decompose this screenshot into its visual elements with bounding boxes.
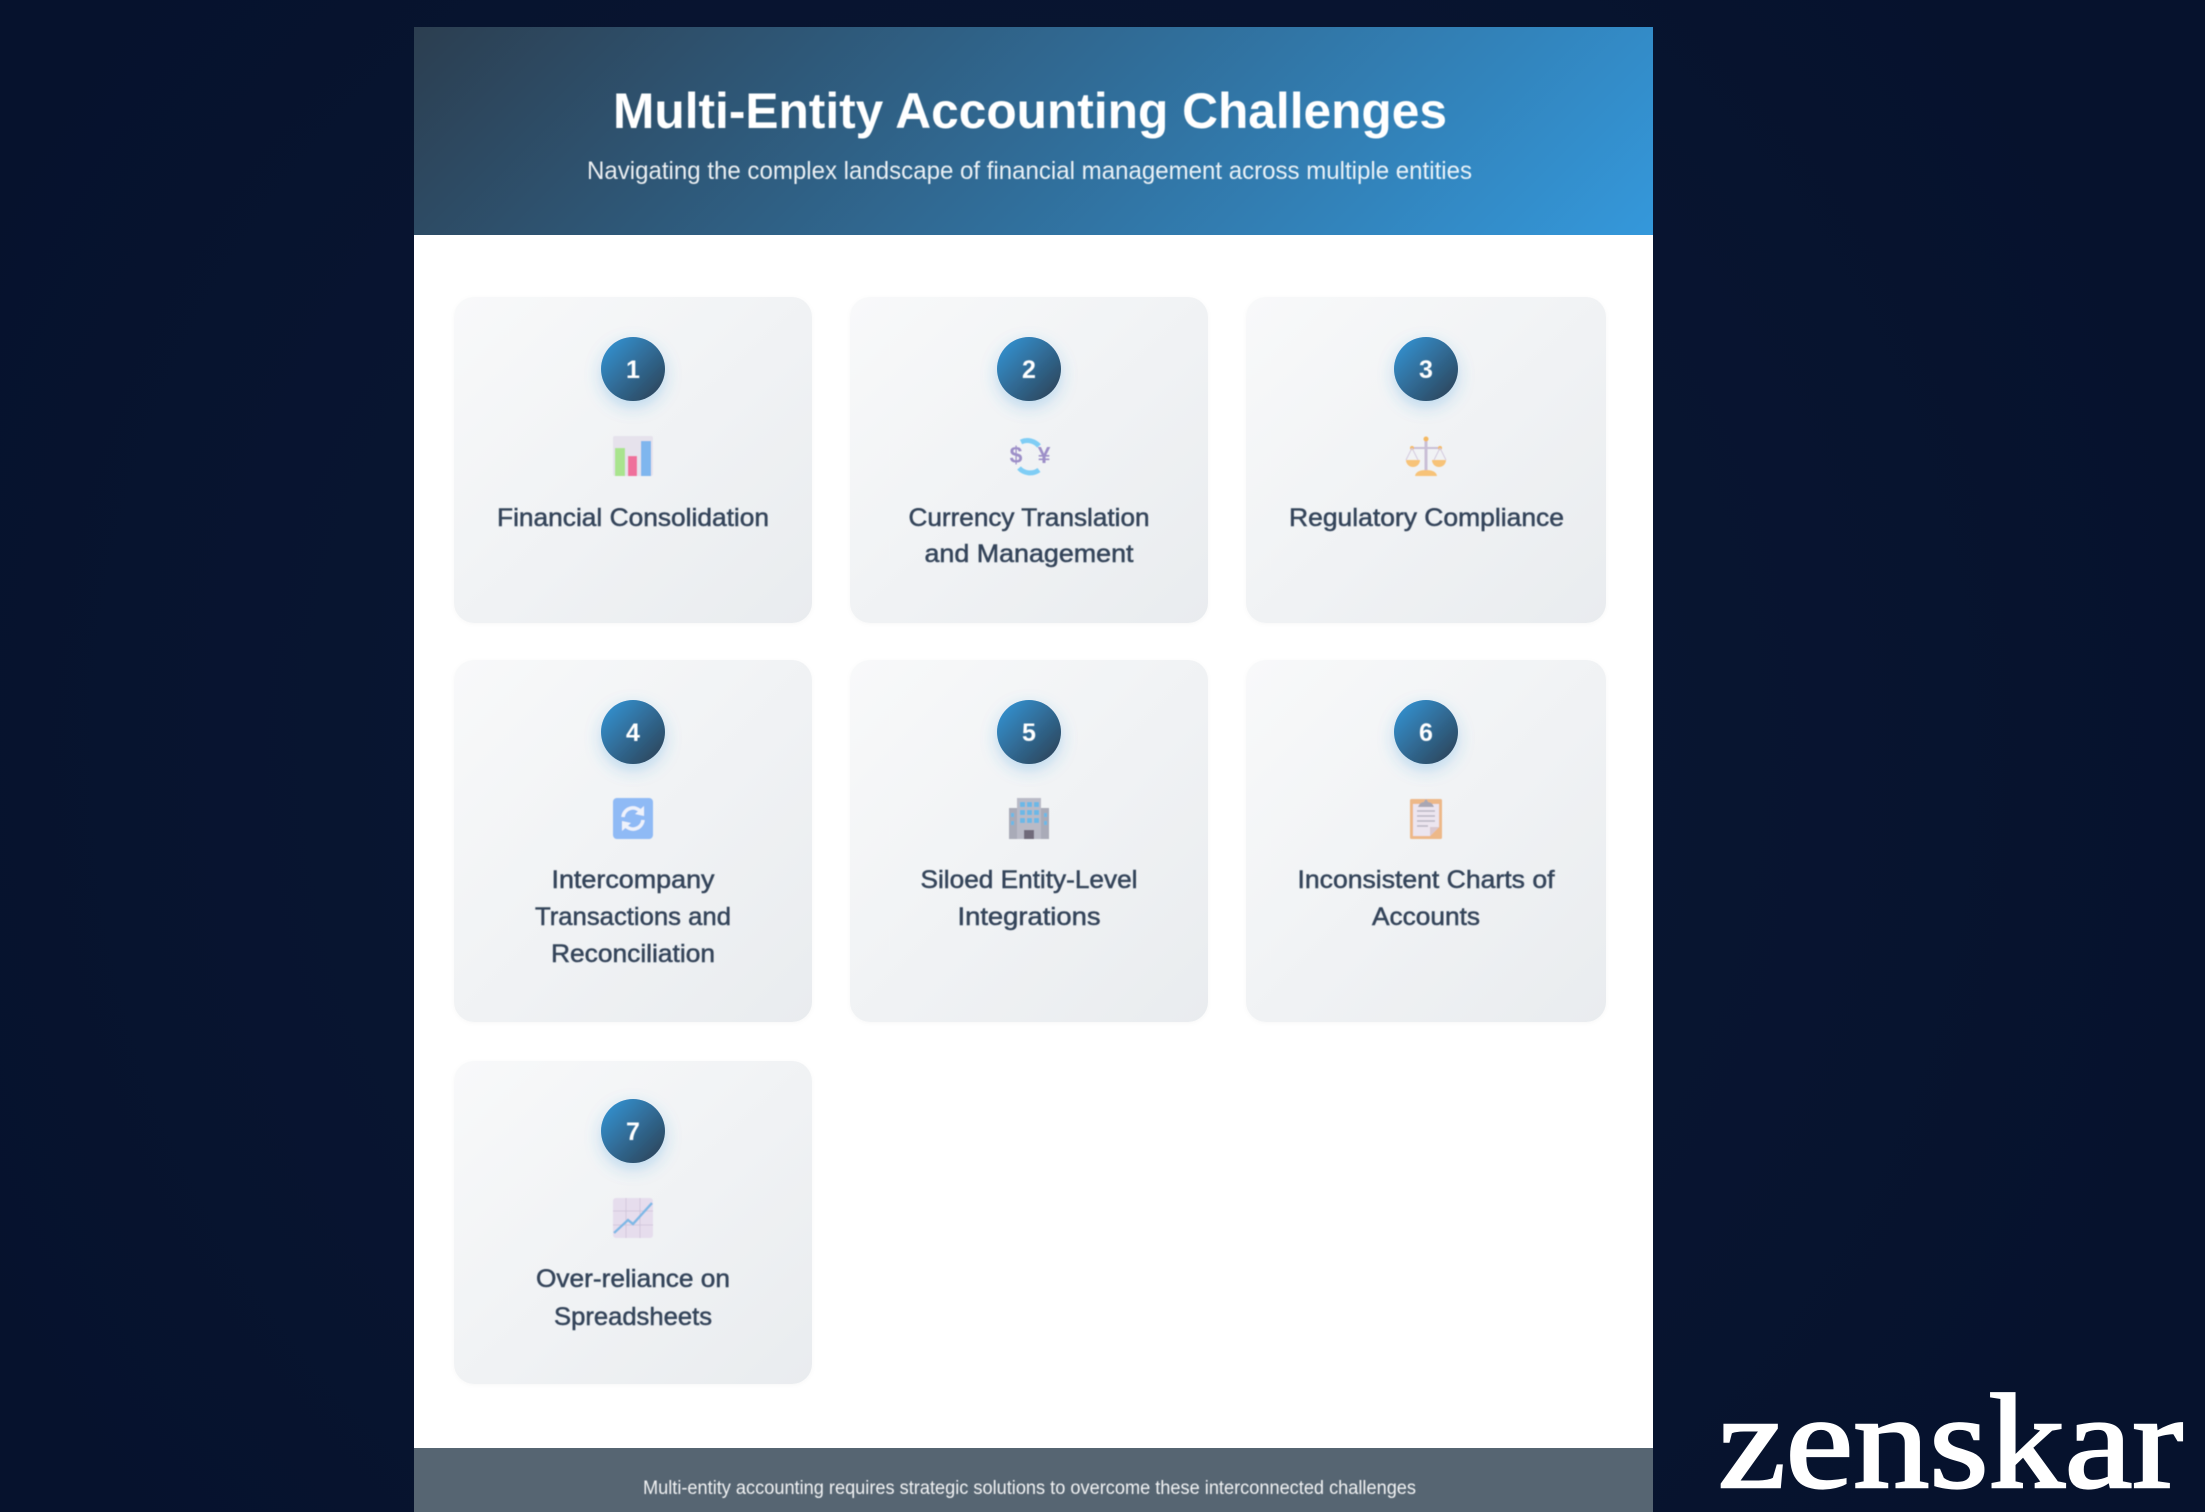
label [920, 866, 1138, 931]
number badge 1 [601, 337, 665, 401]
icon: refresh arrows [613, 798, 653, 839]
icon: balance scales [1406, 436, 1446, 476]
label [1298, 866, 1555, 931]
label: Currency Translation [908, 504, 1150, 532]
card 4: Intercompany Transactions and Reconciliation [454, 660, 812, 1022]
icon: office building [1009, 798, 1049, 839]
number badge 4 [601, 700, 665, 764]
label: and Management [924, 540, 1134, 568]
label: Inconsistent Charts of [1298, 866, 1555, 894]
label [908, 504, 1150, 568]
label: Over-reliance on [536, 1265, 730, 1293]
icon: bar chart [613, 436, 653, 476]
number badge 2 [997, 337, 1061, 401]
icon: currency exchange: $ [1010, 442, 1023, 468]
label: Reconciliation [551, 940, 715, 968]
label: Financial Consolidation [497, 504, 769, 532]
icon: currency exchange: ¥ [1038, 442, 1051, 468]
card 1: Financial Consolidation [454, 297, 812, 623]
footer text: Multi-entity accounting requires strategic solutions to overcome these interconnected challenges [643, 1478, 1416, 1499]
icon: currency exchange [1010, 441, 1051, 473]
number badge 1: 1 [626, 356, 640, 384]
card 6: Inconsistent Charts of Accounts [1246, 660, 1606, 1022]
card 5: Siloed Entity-Level Integrations [850, 660, 1208, 1022]
number badge 6: 6 [1419, 719, 1433, 747]
title: Multi-Entity Accounting Challenges [613, 83, 1447, 139]
label: Accounts [1372, 903, 1480, 931]
card 7: Over-reliance on Spreadsheets [454, 1061, 812, 1384]
label: Transactions and [535, 903, 731, 931]
label: Siloed Entity-Level [920, 866, 1138, 894]
number badge 7 [601, 1099, 665, 1163]
footer band [414, 1448, 1653, 1512]
number badge 6 [1394, 700, 1458, 764]
number badge 4: 4 [626, 719, 640, 747]
icon: line chart [613, 1198, 653, 1238]
card 2: Currency Translation and Management [850, 297, 1208, 623]
label: Integrations [958, 903, 1100, 931]
number badge 5 [997, 700, 1061, 764]
label [536, 1265, 730, 1331]
number badge 2: 2 [1022, 356, 1036, 384]
icon: clipboard [1410, 799, 1442, 839]
subtitle: Navigating the complex landscape of financial management across multiple entities [587, 157, 1472, 185]
header band [414, 27, 1653, 235]
label: Spreadsheets [554, 1303, 712, 1331]
card 3: Regulatory Compliance [1246, 297, 1606, 623]
label: Regulatory Compliance [1289, 504, 1564, 532]
number badge 3: 3 [1419, 356, 1433, 384]
number badge 3 [1394, 337, 1458, 401]
label: Intercompany [552, 866, 715, 894]
number badge 5: 5 [1022, 719, 1036, 747]
label [535, 866, 731, 968]
number badge 7: 7 [626, 1118, 640, 1146]
panel: infographic card [414, 27, 1653, 1512]
